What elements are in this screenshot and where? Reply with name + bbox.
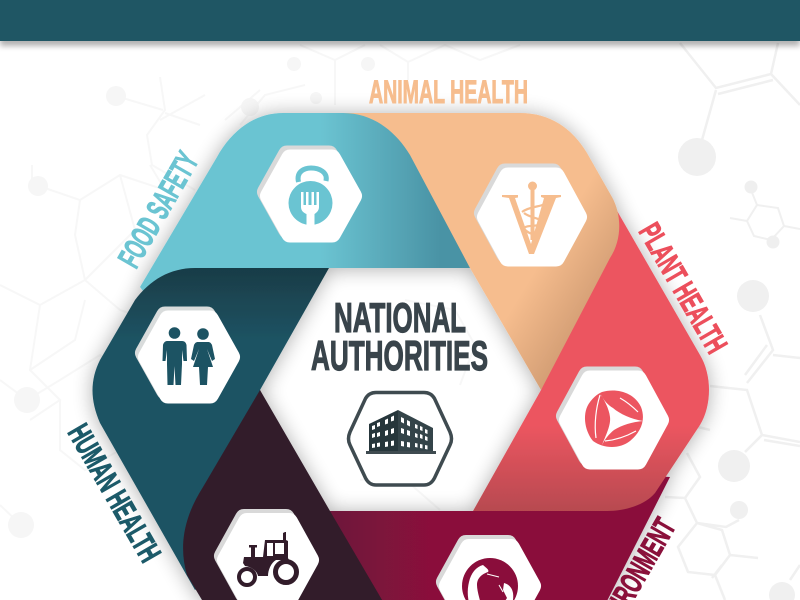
icon: globe — [462, 558, 518, 600]
panel: food safety — [140, 113, 470, 300]
title: national authorities: NATIONAL — [334, 294, 466, 341]
panel: agriculture — [183, 390, 385, 600]
hexagon pinwheel diagram — [92, 113, 709, 600]
icon: tractor — [239, 532, 296, 585]
title: national authorities — [311, 294, 488, 379]
panel: human health — [92, 268, 329, 590]
icon: three leaves — [585, 391, 643, 447]
title: national authorities: AUTHORITIES — [311, 332, 488, 379]
label: animal health: ANIMAL HEALTH — [369, 74, 528, 110]
panel: plant health — [473, 202, 709, 511]
icon: veterinary V — [502, 182, 561, 254]
icon: man and woman — [162, 327, 215, 385]
header bar — [0, 0, 800, 46]
panel: animal health — [340, 113, 619, 390]
icon: government building — [348, 392, 452, 485]
label: plant health: PLANT HEALTH — [632, 217, 734, 359]
icon: lock with fork — [288, 168, 332, 225]
panel: environment — [320, 470, 670, 600]
label: food safety: FOOD SAFETY — [111, 146, 206, 274]
